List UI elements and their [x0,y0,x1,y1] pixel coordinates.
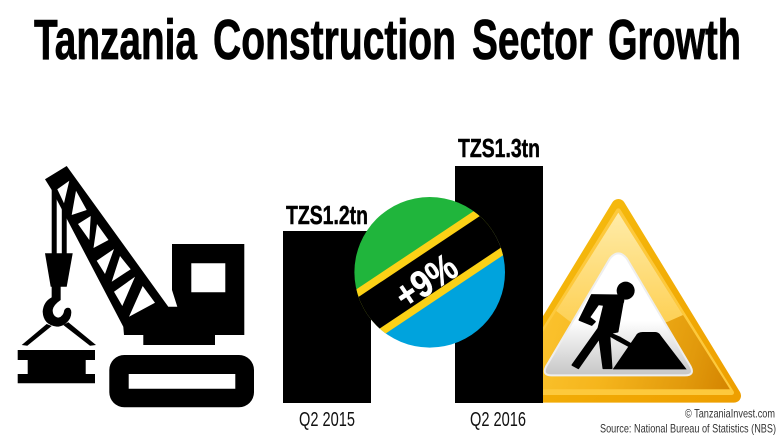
sign white panel [545,253,692,375]
bar: Q2 2016 [455,166,543,403]
sign face [543,212,730,390]
crane hook block [45,253,73,287]
icon: road works warning sign [543,199,741,403]
worker figure [572,282,687,369]
title: Tanzania [34,8,198,72]
axis label: Q2 2015: Q2 2015 [299,409,355,431]
sign outer border [503,206,734,396]
growth badge: Tanzania flag circle [354,197,505,348]
growth label: +9% [387,246,466,318]
bar value: TZS1.2tn: TZS1.2tn [286,200,368,230]
crane ropes [52,188,67,255]
bar value: TZS1.3tn: TZS1.3tn [458,133,540,163]
crane track [109,355,254,407]
title: Sector [472,8,593,72]
title [34,8,741,72]
sign inner border [505,211,732,393]
title: Construction [213,8,456,72]
crane boom [45,166,244,345]
crane hook [43,286,71,327]
axis label: Q2 2016: Q2 2016 [470,409,526,431]
icon: crawler crane [18,166,254,407]
crane slings [22,322,96,346]
bar: Q2 2015 [283,231,371,403]
crane load [18,350,95,383]
